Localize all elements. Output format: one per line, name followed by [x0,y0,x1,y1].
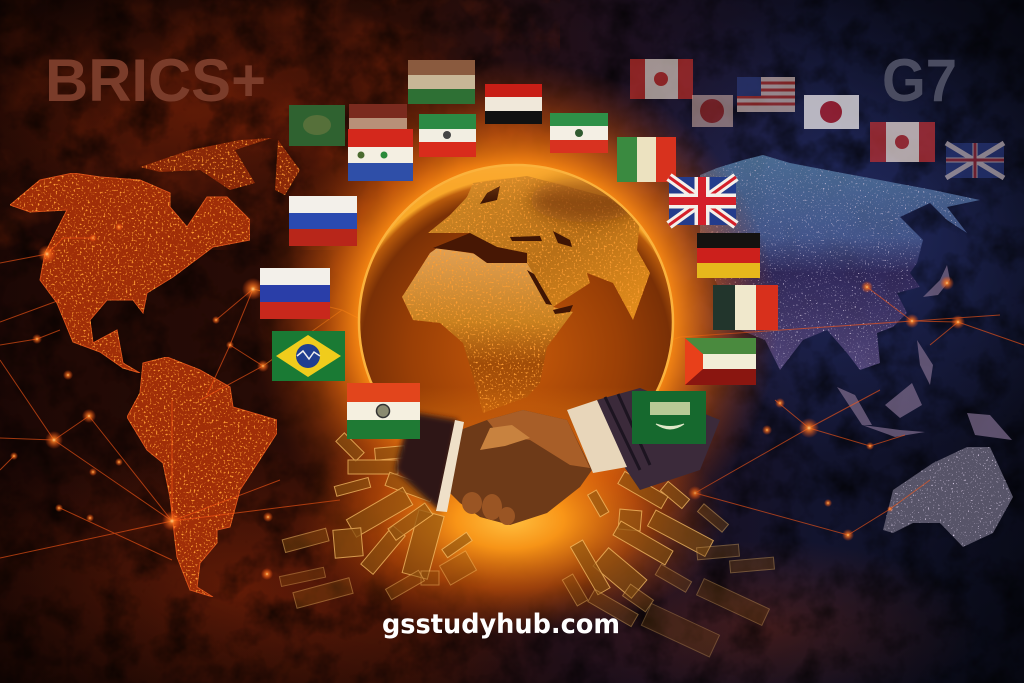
flag: Saudi green emblem [632,391,706,444]
flag: red hoist green white dark red [685,338,756,385]
network nodes [10,223,965,580]
Africa on globe [402,248,573,413]
South America [127,357,277,597]
Arctic islands and Greenland [140,138,300,195]
flag: UK [669,177,736,225]
flag: Germany [697,233,760,278]
Japan and Indonesia [837,265,1012,440]
shaded Central Asia [530,178,640,222]
flag: faded USA [737,77,795,112]
flag: dark green cream red [713,285,778,330]
flag: Russia lower [260,268,330,319]
bright rim at bottom [420,166,608,460]
Eurasia on globe [428,176,650,320]
thumb [480,425,530,450]
flag: faded Japan [804,95,859,129]
heading: G7: G7 [882,47,957,114]
Eurasia [700,155,980,370]
handshake [395,388,720,525]
BRICS+ flags [260,60,608,439]
heading: BRICS+: BRICS+ [45,47,266,114]
flag: green white red [419,114,476,157]
upper hand highlight [487,410,590,468]
flag: red white black [485,84,542,124]
left cuff [436,420,464,512]
right cuff [567,400,627,473]
banknotes right [562,444,774,657]
flag: Russia upper [289,196,357,246]
flag: muted orange tan green [408,60,475,104]
flag: faded crest [692,95,733,127]
flag: faded Canada top [630,59,693,99]
flag: Italy [617,137,676,182]
flag: faded red and tan [349,104,407,132]
flag: faded UK [946,143,1004,178]
banknotes left [279,433,476,608]
Mediterranean [433,233,527,263]
network lines [0,238,1024,560]
G7 and partner flags [617,59,1004,444]
flag: red white blue [348,129,413,181]
left sleeve [395,412,458,512]
lower central glow [295,405,725,635]
North America [10,173,250,373]
inland seas [480,186,573,314]
flag: faded Canada lower [870,122,935,162]
lower fingers [462,492,515,525]
flag: green crest [289,105,345,146]
hand [450,410,592,525]
flag: India [347,383,420,439]
right sleeve [597,388,720,490]
flag: green white red 2 [550,113,608,153]
Australia [883,447,1013,547]
globe [262,68,774,544]
map: Eurasia and islands [700,155,1013,547]
flag: Brazil [272,331,345,381]
website label: gsstudyhub.com [382,609,620,640]
map: Americas [10,138,300,597]
